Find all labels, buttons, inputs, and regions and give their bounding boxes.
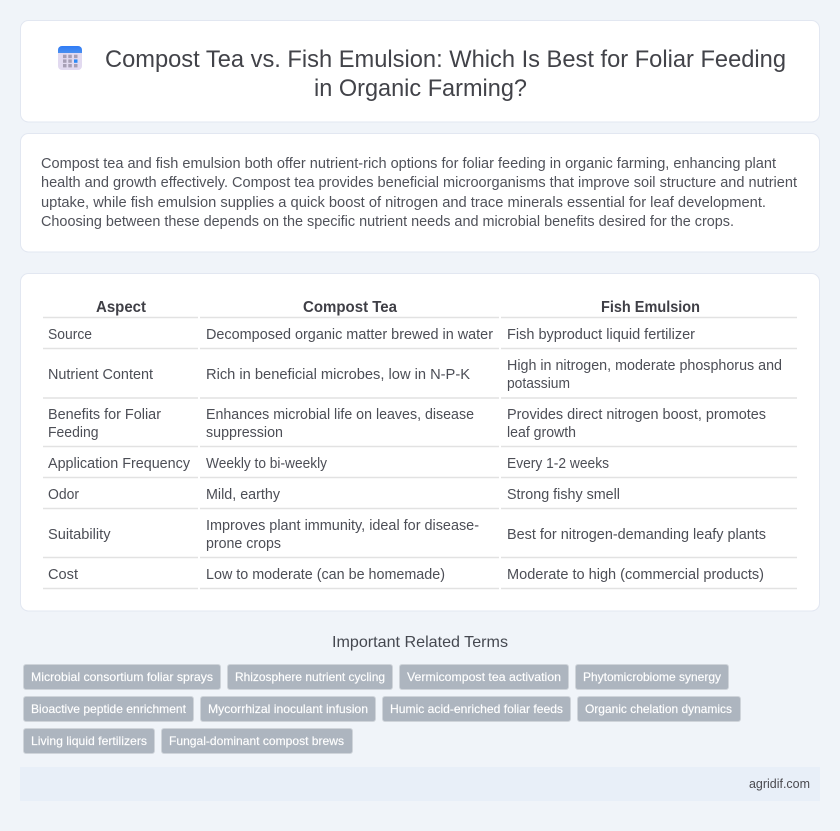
row: nutrient content: potassium [507,376,570,392]
table header: Aspect [96,299,147,316]
row: suitability: Improves plant immunity, ideal for disease- [206,518,479,534]
row: application frequency: Every 1-2 weeks [507,456,609,472]
tag [228,664,392,690]
text block: description: Choosing between these depends on the specific nutrient needs and microbial benefits desired for the crops. [41,214,734,230]
row: benefits for foliar feeding: Provides direct nitrogen boost, promotes [507,407,766,423]
row: benefits for foliar feeding: Benefits for Foliar [48,407,161,423]
row: source [48,327,695,343]
table header: Fish Emulsion [601,299,700,316]
tag [24,696,194,722]
tag [400,664,568,690]
row: nutrient content [48,358,782,392]
tag: Bioactive peptide enrichment [31,702,187,716]
row: suitability: Suitability [48,527,111,543]
row: application frequency: Application Frequency [48,456,191,472]
tag [162,728,352,754]
text block: description [41,156,797,230]
row: nutrient content: Rich in beneficial microbes, low in N-P-K [206,367,470,383]
tag: Organic chelation dynamics [585,702,732,716]
title [105,46,786,102]
row: benefits for foliar feeding [48,407,766,441]
tag [200,696,376,722]
icon: calendar [58,46,82,70]
panel: description [20,134,820,252]
table header [96,299,700,316]
row: source: Source [48,327,92,343]
tag: Living liquid fertilizers [31,734,147,748]
tag [578,696,740,722]
row: nutrient content: High in nitrogen, moderate phosphorus and [507,358,782,374]
row: cost: Moderate to high (commercial products) [507,567,764,583]
tag: Phytomicrobiome synergy [583,670,721,684]
row: cost: Cost [48,567,78,583]
title: Compost Tea vs. Fish Emulsion: Which Is Best for Foliar Feeding [105,46,786,73]
text block: description: Compost tea and fish emulsion both offer nutrient-rich options for foliar feeding in organic farming, enhancing plant [41,156,776,172]
tag: Mycorrhizal inoculant infusion [208,702,368,716]
row: source: Fish byproduct liquid fertilizer [507,327,695,343]
panel: comparison table [20,274,820,611]
row: benefits for foliar feeding: Feeding [48,425,98,441]
row: suitability [48,518,766,552]
tag: Fungal-dominant compost brews [169,734,344,748]
row: application frequency [48,456,609,472]
row: cost: Low to moderate (can be homemade) [206,567,445,583]
text block: description: uptake, while fish emulsion supplies a quick boost of nitrogen and trace minerals essential for leaf development. [41,195,766,211]
tag: Vermicompost tea activation [407,670,561,684]
title: in Organic Farming? [314,75,527,102]
footer: agridif.com [749,776,810,791]
row: odor: Mild, earthy [206,487,281,503]
row: odor [48,487,620,503]
tag [576,664,728,690]
row: benefits for foliar feeding: Enhances microbial life on leaves, disease [206,407,474,423]
tag: Rhizosphere nutrient cycling [235,670,385,684]
text block: description: health and growth effectively. Compost tea provides beneficial microorganisms that improve soil structure and nutrient [41,175,797,191]
row: source: Decomposed organic matter brewed in water [206,327,493,343]
row: nutrient content: Nutrient Content [48,367,153,383]
tag [24,664,220,690]
row: odor: Strong fishy smell [507,487,620,503]
row: cost [48,567,764,583]
panel: title header [20,20,820,122]
row: benefits for foliar feeding: leaf growth [507,425,576,441]
tag: Humic acid-enriched foliar feeds [390,702,563,716]
row: suitability: prone crops [206,536,281,552]
related term tags [24,664,740,754]
row: application frequency: Weekly to bi-weekly [206,456,328,472]
footer [20,767,820,801]
tag [382,696,570,722]
row: suitability: Best for nitrogen-demanding leafy plants [507,527,766,543]
row: odor: Odor [48,487,79,503]
table header: Compost Tea [303,299,397,316]
row: benefits for foliar feeding: suppression [206,425,283,441]
tag: Microbial consortium foliar sprays [31,670,213,684]
tag [24,728,154,754]
heading: important related terms: Important Related Terms [332,634,508,651]
